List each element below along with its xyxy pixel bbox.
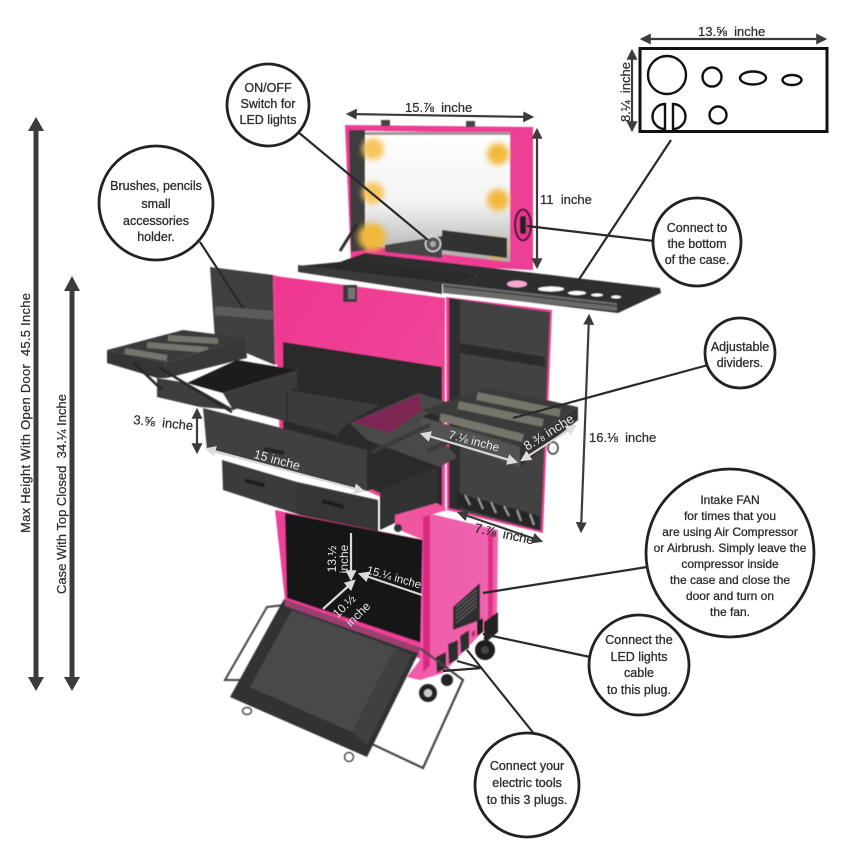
cable connector (515, 210, 531, 240)
dimension: 15.1/4 inch width: 15.¼ inche (365, 565, 423, 592)
callout: on/off switch (227, 64, 309, 146)
callout: connect to bottom (653, 198, 741, 286)
callout: on/off switch: ON/OFF (244, 81, 292, 95)
case height arrow: top closed: Case With Top Closed 34.¼ Inche (54, 394, 69, 594)
power switch (426, 236, 440, 252)
product: makeup case photo (107, 120, 661, 768)
callout: led cable plug: to this plug. (607, 683, 671, 697)
callout: intake fan: the fan. (710, 605, 750, 619)
slide-out shelf (298, 253, 661, 313)
dimension: 15.7/8 inch lid width (348, 100, 532, 117)
mirror lights (358, 138, 509, 258)
two lower drawers (222, 430, 437, 540)
callout: connect to bottom: Connect to (667, 221, 727, 235)
left door (210, 267, 280, 366)
callout: connect to bottom: of the case. (665, 253, 729, 267)
dimension: 13.1/2 inch height: 13.½ (325, 546, 339, 572)
callout: adjustable dividers: Adjustable (711, 340, 769, 354)
dimension: 11 inch lid height: 11 inche (540, 192, 592, 207)
callout: on/off switch: Switch for (241, 97, 295, 111)
dimension: 16.1/8 inch (581, 316, 656, 531)
full height arrow: max height with open door: Max Height With Open Door 45.5 Inche (18, 293, 33, 533)
full height arrow: max height with open door (18, 117, 44, 691)
callout: brushes holder: holder. (137, 230, 175, 244)
callout: intake fan: are using Air Compressor (662, 525, 798, 539)
callout: adjustable dividers: dividers. (717, 356, 763, 370)
cutout diagram (640, 48, 827, 132)
dimension: 13.1/2 inch height (325, 533, 351, 579)
callout: electric tools: electric tools (492, 776, 562, 790)
vent (453, 583, 480, 630)
drop-down door tray (225, 599, 463, 768)
callout: intake fan: for times that you (684, 509, 776, 523)
dimension: 8.3/8 inch tray: 8.⅜ inche (521, 411, 576, 453)
callout: electric tools (475, 733, 579, 837)
callout: intake fan: compressor inside (681, 557, 779, 571)
callout: brushes holder: Brushes, pencils (110, 179, 202, 193)
open center drawer (203, 390, 380, 491)
callout: led cable plug (589, 615, 689, 715)
callout: intake fan: or Airbrush. Simply leave the (654, 541, 807, 555)
cutout diagram dimension height: 8.¼ inche (618, 62, 633, 122)
callout: on/off switch: LED lights (240, 113, 296, 127)
brushes leader line (200, 242, 243, 308)
dimension: 10.1/2 inch depth (323, 581, 373, 629)
callout: brushes holder: accessories (123, 214, 189, 228)
dimension: 10.1/2 inch depth: 10.½ (330, 592, 359, 621)
hook (548, 442, 558, 454)
dimension: 7.1/8 inch tray (422, 428, 516, 462)
dimension: 7.7/8 inch: 7.⅞ inche (473, 520, 535, 547)
power socket (477, 618, 483, 636)
leader lines (298, 132, 708, 735)
callout: brushes holder: small (141, 197, 171, 211)
dimension: 15 inch drawer (207, 447, 363, 491)
mirror lid (340, 120, 533, 270)
front pink body (275, 276, 445, 517)
callout: brushes holder (99, 146, 213, 260)
dimension: 10.1/2 inch depth: inche (343, 599, 373, 629)
dimension: 3.5/8 inch (133, 410, 197, 452)
callout: intake fan: door and turn on (686, 589, 774, 603)
right stacked trays (350, 387, 578, 467)
case height arrow: top closed (54, 276, 80, 691)
left stacked trays (107, 330, 297, 412)
dimension: 15.7/8 inch lid width: 15.⅞ inche (405, 100, 472, 115)
dimension: 16.1/8 inch: 16.⅛ inche (589, 430, 656, 445)
wheels (419, 612, 498, 702)
plugs (436, 630, 469, 673)
callout: led cable plug: LED lights (611, 650, 667, 664)
cutout diagram dimension width: 13.⅝ inche (698, 24, 765, 39)
callout: led cable plug: cable (624, 666, 654, 680)
dimension: 15 inch drawer: 15 inche (252, 447, 302, 473)
dimension: 11 inch lid height (537, 130, 592, 267)
hinge arm (340, 224, 357, 251)
right door (446, 297, 558, 533)
callout: adjustable dividers (705, 318, 775, 388)
callout: electric tools: Connect your (490, 759, 564, 773)
callout: intake fan (646, 469, 814, 637)
callout: intake fan: the case and close the (670, 573, 790, 587)
dimension: 7.1/8 inch tray: 7.⅛ inche (447, 428, 501, 455)
underside bolt (395, 503, 447, 540)
lower pink cabinet (275, 503, 498, 702)
callout: electric tools: to this 3 plugs. (487, 793, 567, 807)
callout: led cable plug: Connect the (605, 633, 673, 647)
dimension: 3.5/8 inch: 3.⅝ inche (133, 412, 194, 433)
top rail (298, 265, 442, 294)
dimension: 7.7/8 inch (459, 513, 541, 547)
callout: intake fan: Intake FAN (700, 493, 760, 507)
dimension: 13.1/2 inch height: inche (337, 544, 351, 573)
callout: connect to bottom: the bottom (667, 237, 727, 251)
